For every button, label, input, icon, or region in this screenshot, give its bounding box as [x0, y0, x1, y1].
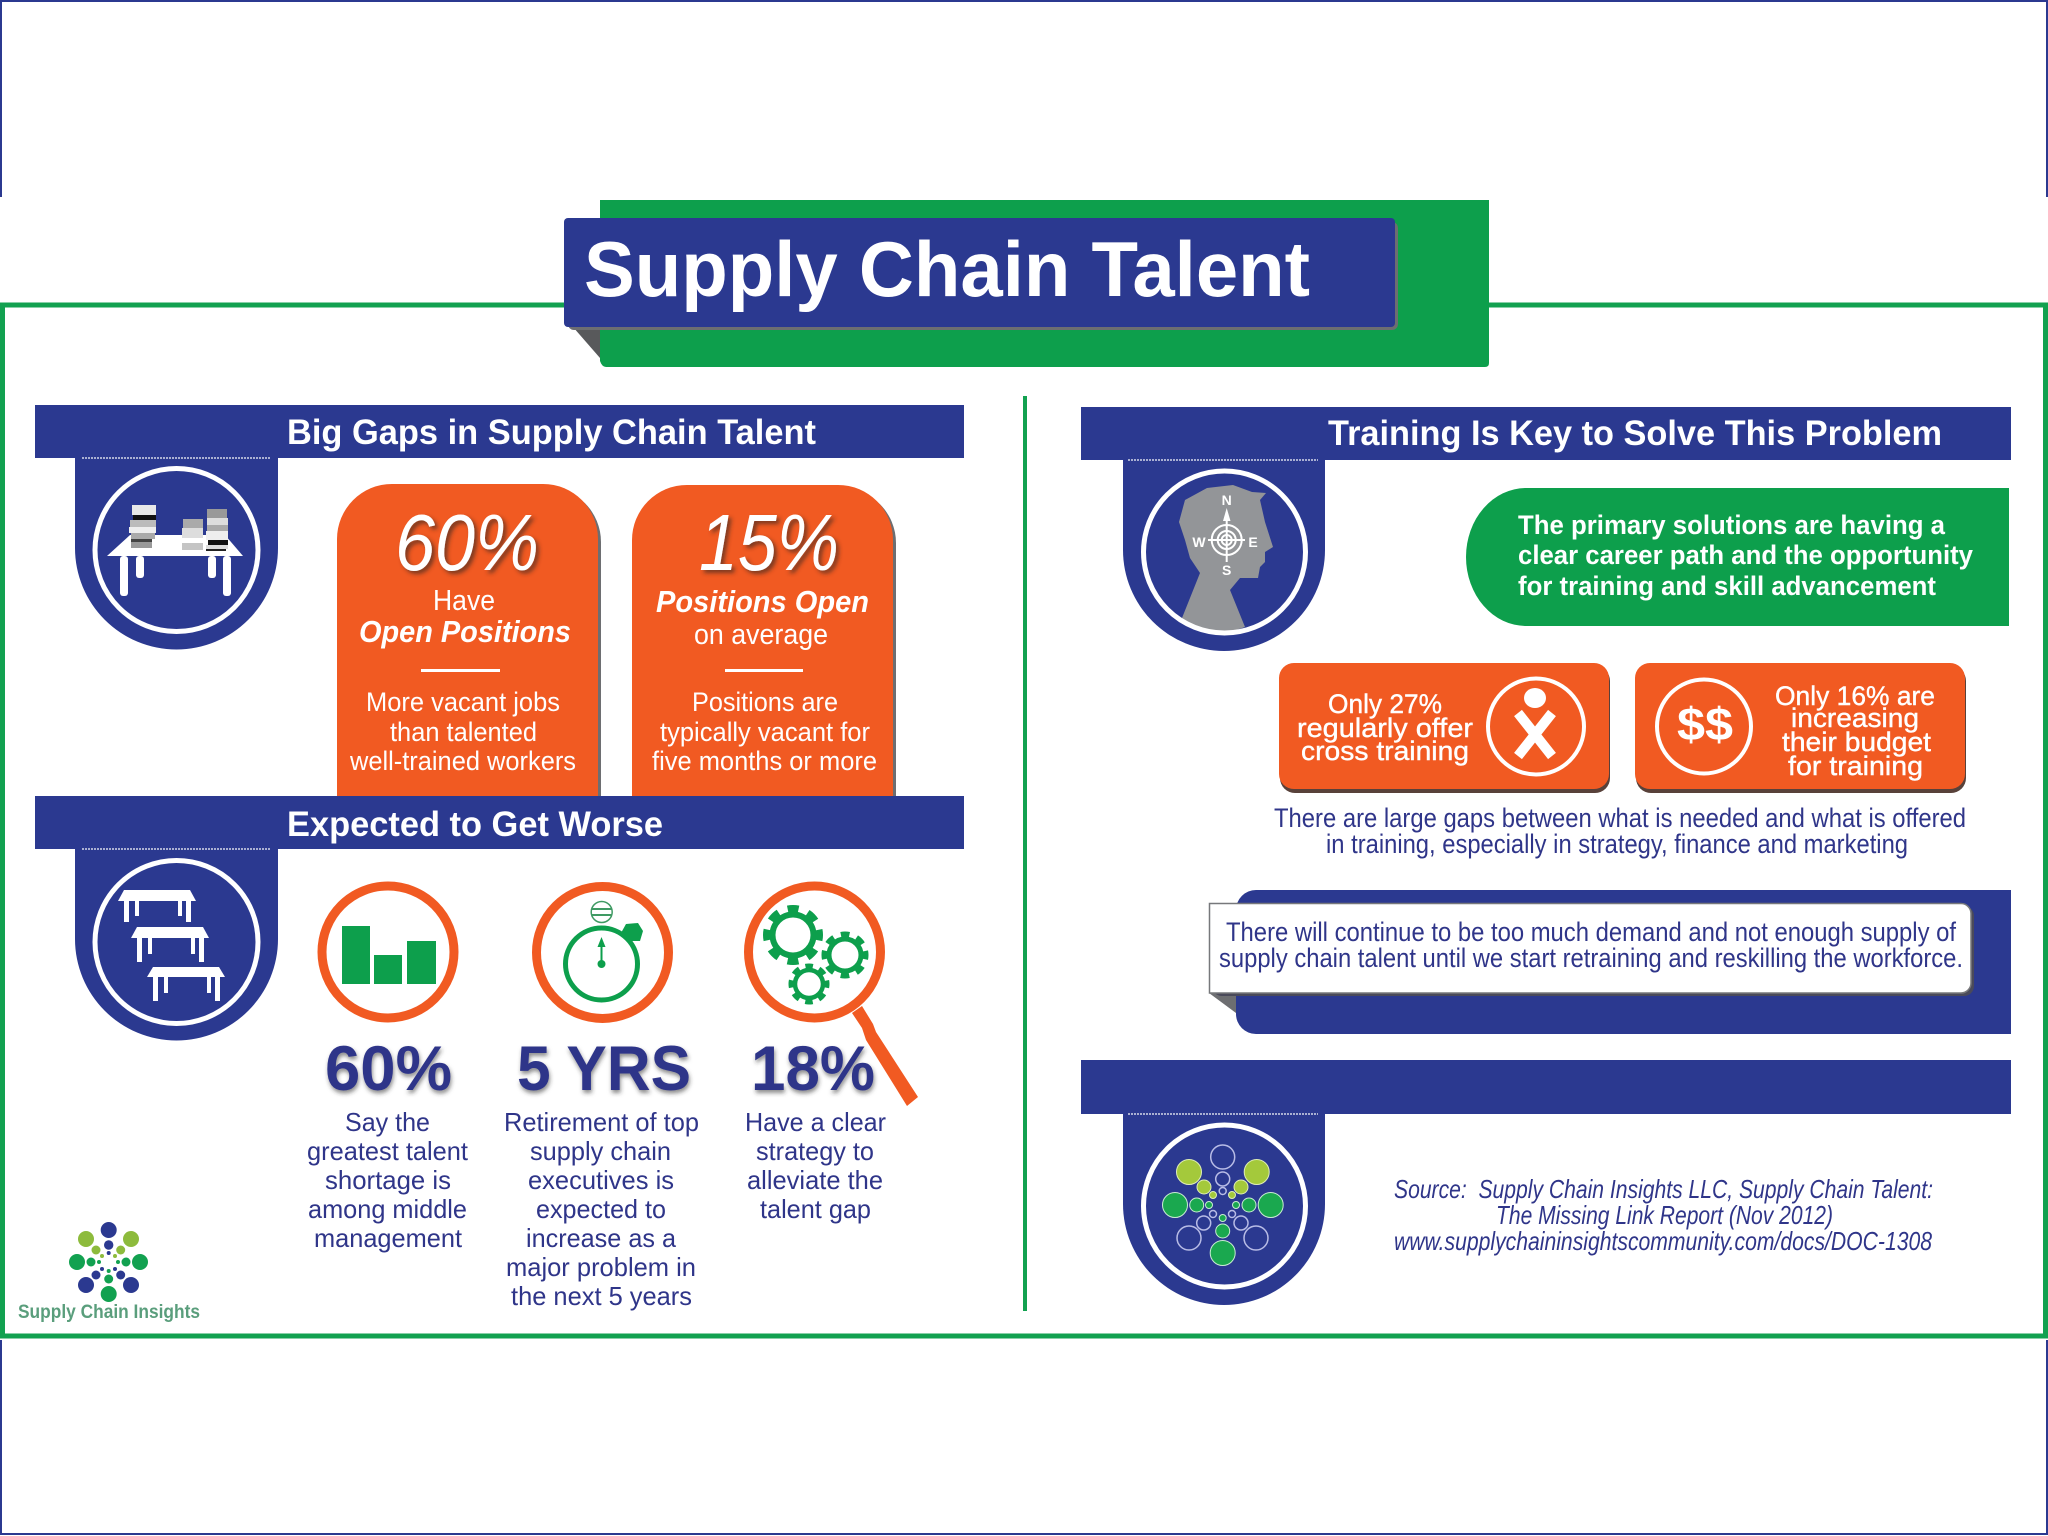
text: clear strategy: strategy to — [756, 1136, 874, 1166]
panel: training — [1081, 407, 2011, 1034]
panel: big gaps — [35, 405, 964, 800]
stat box: 16% training budget — [1635, 663, 1966, 793]
stat box: 16% training budget: increasing — [1791, 703, 1919, 733]
callout: primary solutions: clear career path and the opportunity — [1518, 540, 1973, 570]
text: middle management: greatest talent — [307, 1136, 469, 1166]
icon: insights logo badge — [1123, 1114, 1325, 1305]
stat card: 15% positions open — [632, 485, 896, 800]
stat card: 60% open positions: 60% — [395, 498, 539, 587]
text: retirement: expected to — [536, 1194, 666, 1224]
logo: supply chain insights — [18, 1222, 200, 1323]
stat card: 15% positions open: Positions Open — [656, 584, 869, 619]
logo: supply chain insights: Supply Chain Insights — [18, 1302, 200, 1323]
heading bar: big gaps: Big Gaps in Supply Chain Talent — [287, 413, 816, 452]
text: retirement: executives is — [528, 1165, 674, 1195]
stat: 60%: 60% — [325, 1034, 452, 1104]
icon: bar chart in orange ring — [322, 886, 454, 1018]
heading bar: training — [1081, 407, 2011, 460]
stat box: 27% cross training: cross training — [1301, 736, 1469, 766]
text: clear strategy: talent gap — [760, 1194, 871, 1224]
stat box: 16% training budget: for training — [1788, 751, 1923, 781]
panel: expected to get worse — [35, 796, 964, 1311]
heading bar: expected to get worse — [35, 796, 964, 849]
title banner — [564, 200, 1489, 367]
stat box: 16% training budget: Only 16% are — [1775, 681, 1935, 711]
text: middle management: shortage is — [325, 1165, 451, 1195]
text: retirement: Retirement of top — [504, 1107, 699, 1137]
title: Supply Chain Talent — [584, 225, 1310, 313]
text: middle management — [307, 1107, 469, 1253]
icon: gears in magnifying glass — [748, 886, 918, 1106]
icon: head with compass: S — [1222, 562, 1231, 578]
text: large gaps: There are large gaps between what is needed and what is offered — [1274, 803, 1966, 833]
stat card: 60% open positions: Have — [433, 585, 495, 617]
text: retirement — [504, 1107, 699, 1311]
text: clear strategy — [745, 1107, 886, 1224]
text: source citation: www.supplychaininsightscommunity.com/docs/DOC-1308 — [1394, 1226, 1932, 1256]
stat card: 15% positions open: five months or more — [652, 746, 877, 776]
callout: retraining: supply chain talent until we start retraining and reskilling the workforce. — [1219, 943, 1963, 973]
icon: head with compass: W — [1192, 534, 1206, 550]
text: middle management: among middle — [308, 1194, 467, 1224]
stat box: 27% cross training — [1279, 663, 1610, 793]
icon: table with books — [75, 458, 278, 649]
stat card: 15% positions open: on average — [694, 619, 828, 651]
stat card: 15% positions open: Positions are — [692, 687, 838, 717]
panel: source — [1081, 1060, 2011, 1305]
stat card: 60% open positions — [337, 484, 601, 800]
icon: three tables — [75, 849, 278, 1040]
icon: head with compass: N — [1222, 492, 1232, 508]
text: retirement: the next 5 years — [511, 1281, 692, 1311]
icon: stopwatch in orange ring — [536, 886, 668, 1018]
text: middle management: Say the — [345, 1107, 430, 1137]
text: middle management: management — [314, 1223, 463, 1253]
heading bar: training: Training Is Key to Solve This Problem — [1328, 414, 1942, 453]
stat box: 27% cross training: Only 27% — [1328, 689, 1442, 719]
text: source citation — [1394, 1174, 1933, 1256]
stat card: 60% open positions: More vacant jobs — [366, 687, 560, 717]
green frame — [2, 305, 2046, 1336]
text: retirement: supply chain — [530, 1136, 671, 1166]
vertical divider — [1023, 396, 1027, 1311]
callout: retraining — [1209, 890, 2011, 1034]
icon: dollars in circle — [1657, 680, 1751, 774]
stat card: 15% positions open: 15% — [699, 498, 839, 587]
heading bar: expected to get worse: Expected to Get Worse — [287, 805, 663, 844]
text: source citation: Source: Supply Chain Insights LLC, Supply Chain Talent: — [1394, 1174, 1933, 1204]
callout: primary solutions: for training and skill advancement — [1518, 571, 1936, 601]
text: retirement: increase as a — [526, 1223, 677, 1253]
stat: 5 YRS: 5 YRS — [517, 1034, 691, 1104]
stat card: 60% open positions: Open Positions — [359, 614, 571, 649]
stat box: 27% cross training: regularly offer — [1297, 713, 1473, 743]
icon: head with compass: E — [1248, 534, 1258, 550]
text: retirement: major problem in — [506, 1252, 696, 1282]
text: clear strategy: alleviate the — [747, 1165, 883, 1195]
icon: dollars in circle: $$ — [1677, 698, 1733, 750]
heading bar: big gaps — [35, 405, 964, 458]
callout: retraining: There will continue to be too much demand and not enough supply of — [1226, 917, 1956, 947]
callout: primary solutions — [1466, 488, 2009, 626]
text: clear strategy: Have a clear — [745, 1107, 886, 1137]
stat: 18%: 18% — [751, 1034, 875, 1104]
stat card: 15% positions open: typically vacant for — [660, 717, 870, 747]
stat box: 16% training budget: their budget — [1782, 727, 1932, 757]
text: large gaps — [1274, 803, 1966, 859]
text: large gaps: in training, especially in strategy, finance and marketing — [1326, 829, 1908, 859]
callout: primary solutions: The primary solutions are having a — [1518, 510, 1946, 540]
stat card: 60% open positions: well-trained workers — [349, 746, 576, 776]
stat card: 60% open positions: than talented — [390, 717, 537, 747]
icon: person in circle — [1488, 678, 1584, 774]
text: source citation: The Missing Link Report (Nov 2012) — [1496, 1200, 1833, 1230]
icon: head with compass — [1123, 460, 1325, 651]
